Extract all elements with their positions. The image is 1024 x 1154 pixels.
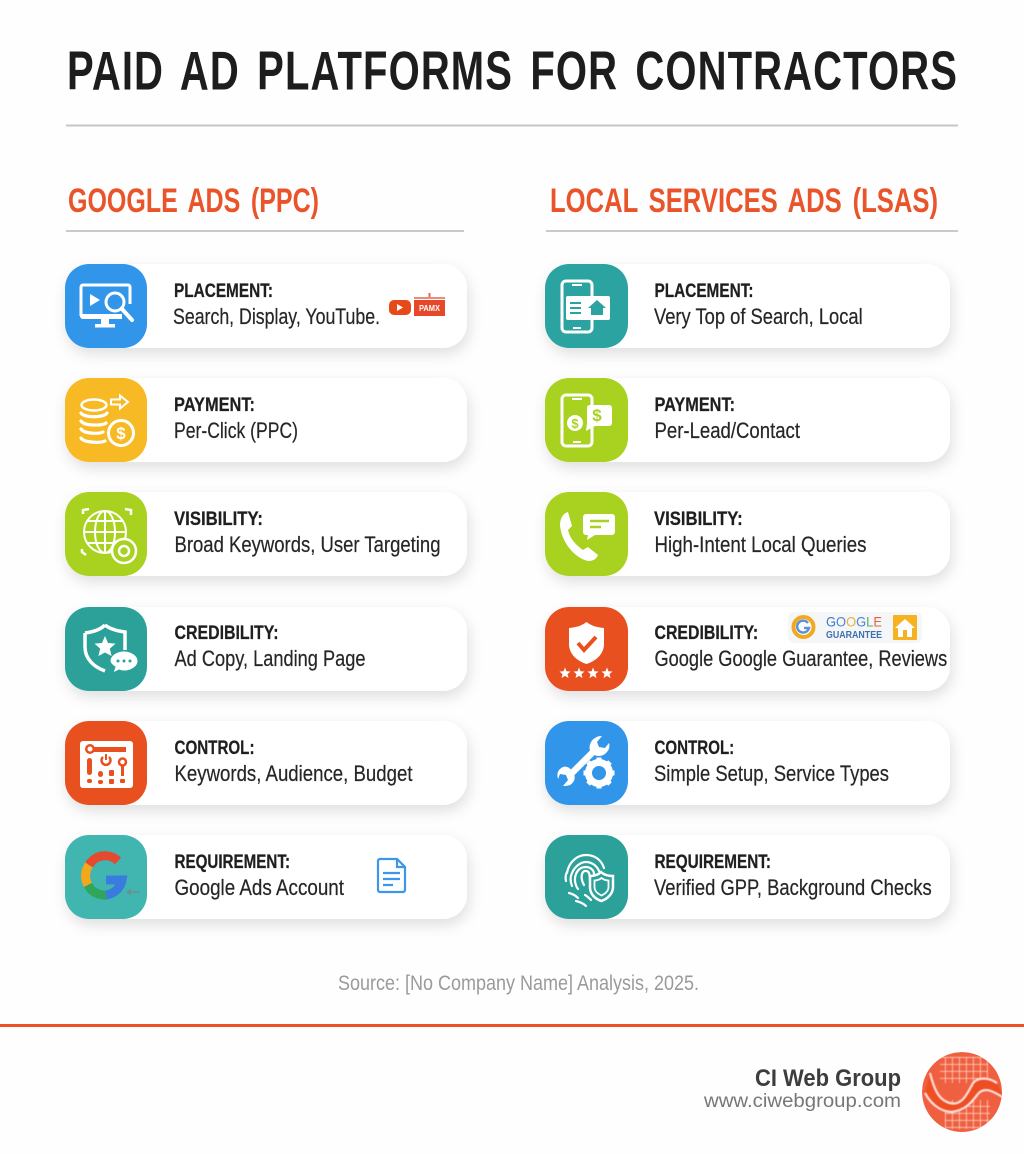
card: [65, 721, 467, 805]
card: [545, 721, 950, 805]
value: Per-Lead/Contact: [654, 418, 801, 443]
row: LSA payment: [545, 378, 950, 462]
card: [65, 492, 467, 576]
value: Simple Setup, Service Types: [654, 761, 889, 786]
row: LSA placement: [545, 264, 950, 348]
row: LSA requirement: [545, 835, 950, 919]
icon: document: [378, 859, 405, 892]
row: Google requirement: [65, 835, 467, 919]
card: [65, 378, 467, 462]
label: REQUIREMENT:: [654, 851, 771, 873]
badge: Google Guarantee: [788, 612, 922, 643]
card: [65, 264, 467, 348]
label: CREDIBILITY:: [654, 622, 758, 644]
row: LSA credibility: [545, 607, 950, 691]
source note: Source: [No Company Name] Analysis, 2025.: [338, 972, 699, 995]
footer url: www.ciwebgroup.com: [703, 1091, 901, 1112]
label: CONTROL:: [654, 737, 734, 759]
row: Google visibility: [65, 492, 467, 576]
value: High-Intent Local Queries: [654, 532, 866, 557]
logo: [922, 1052, 1004, 1132]
value: Verified GPP, Background Checks: [654, 875, 932, 900]
row: Google payment: [65, 378, 467, 462]
badge: Google Guarantee: GUARANTEE: [826, 630, 882, 641]
icon: video badge: [389, 300, 411, 315]
row: LSA control: [545, 721, 950, 805]
heading: Google Ads column: GOOGLE ADS (PPC): [68, 182, 319, 220]
label: CREDIBILITY:: [174, 622, 278, 644]
value: Very Top of Search, Local: [654, 304, 863, 329]
icon: Google G: [65, 835, 147, 919]
value: Google Google Guarantee, Reviews: [654, 646, 947, 671]
footer brand name: CI Web Group: [755, 1065, 901, 1092]
label: REQUIREMENT:: [174, 851, 290, 873]
value: Google Ads Account: [174, 875, 345, 900]
card: [65, 607, 467, 691]
card: [545, 492, 950, 576]
label: VISIBILITY:: [654, 508, 743, 530]
row: Google placement: [65, 264, 467, 348]
card: [65, 835, 467, 919]
row: Google control: [65, 721, 467, 805]
label: CONTROL:: [174, 737, 254, 759]
icon: control panel: [65, 721, 147, 805]
label: PLACEMENT:: [174, 280, 273, 302]
icon: phone with dollar bubble: $: [592, 406, 602, 425]
icon: wrench and gear: [545, 721, 628, 805]
card: [545, 835, 950, 919]
card: [545, 264, 950, 348]
badge: Google Guarantee: GOOGLE: [826, 614, 882, 630]
value: Keywords, Audience, Budget: [174, 761, 413, 786]
card: [545, 378, 950, 462]
label: VISIBILITY:: [174, 508, 263, 530]
icon: ad badge: PAMX: [419, 304, 441, 313]
icon: phone with listing: [545, 264, 628, 348]
row: LSA visibility: [545, 492, 950, 576]
value: Per-Click (PPC): [174, 418, 298, 443]
icon: monitor with magnifier: [65, 264, 147, 348]
value: Broad Keywords, User Targeting: [174, 532, 440, 557]
icon: shield check with stars: [545, 607, 628, 691]
card: [545, 607, 950, 691]
icon: phone with dollar bubble: [545, 378, 628, 462]
value: Ad Copy, Landing Page: [174, 646, 366, 671]
icon: ad badge: [414, 293, 445, 316]
icon: fingerprint and shield: [545, 835, 628, 919]
icon: globe with target: [65, 492, 147, 576]
value: Search, Display, YouTube.: [173, 304, 380, 329]
label: PLACEMENT:: [654, 280, 754, 302]
icon: shield with chat: [65, 607, 147, 691]
icon: coins: $: [116, 424, 126, 443]
icon: phone with dollar bubble: $: [571, 416, 579, 431]
label: PAYMENT:: [174, 394, 255, 416]
icon: coins: [65, 378, 147, 462]
row: Google credibility: [65, 607, 467, 691]
icon: phone and message: [545, 492, 628, 576]
label: PAYMENT:: [654, 394, 735, 416]
